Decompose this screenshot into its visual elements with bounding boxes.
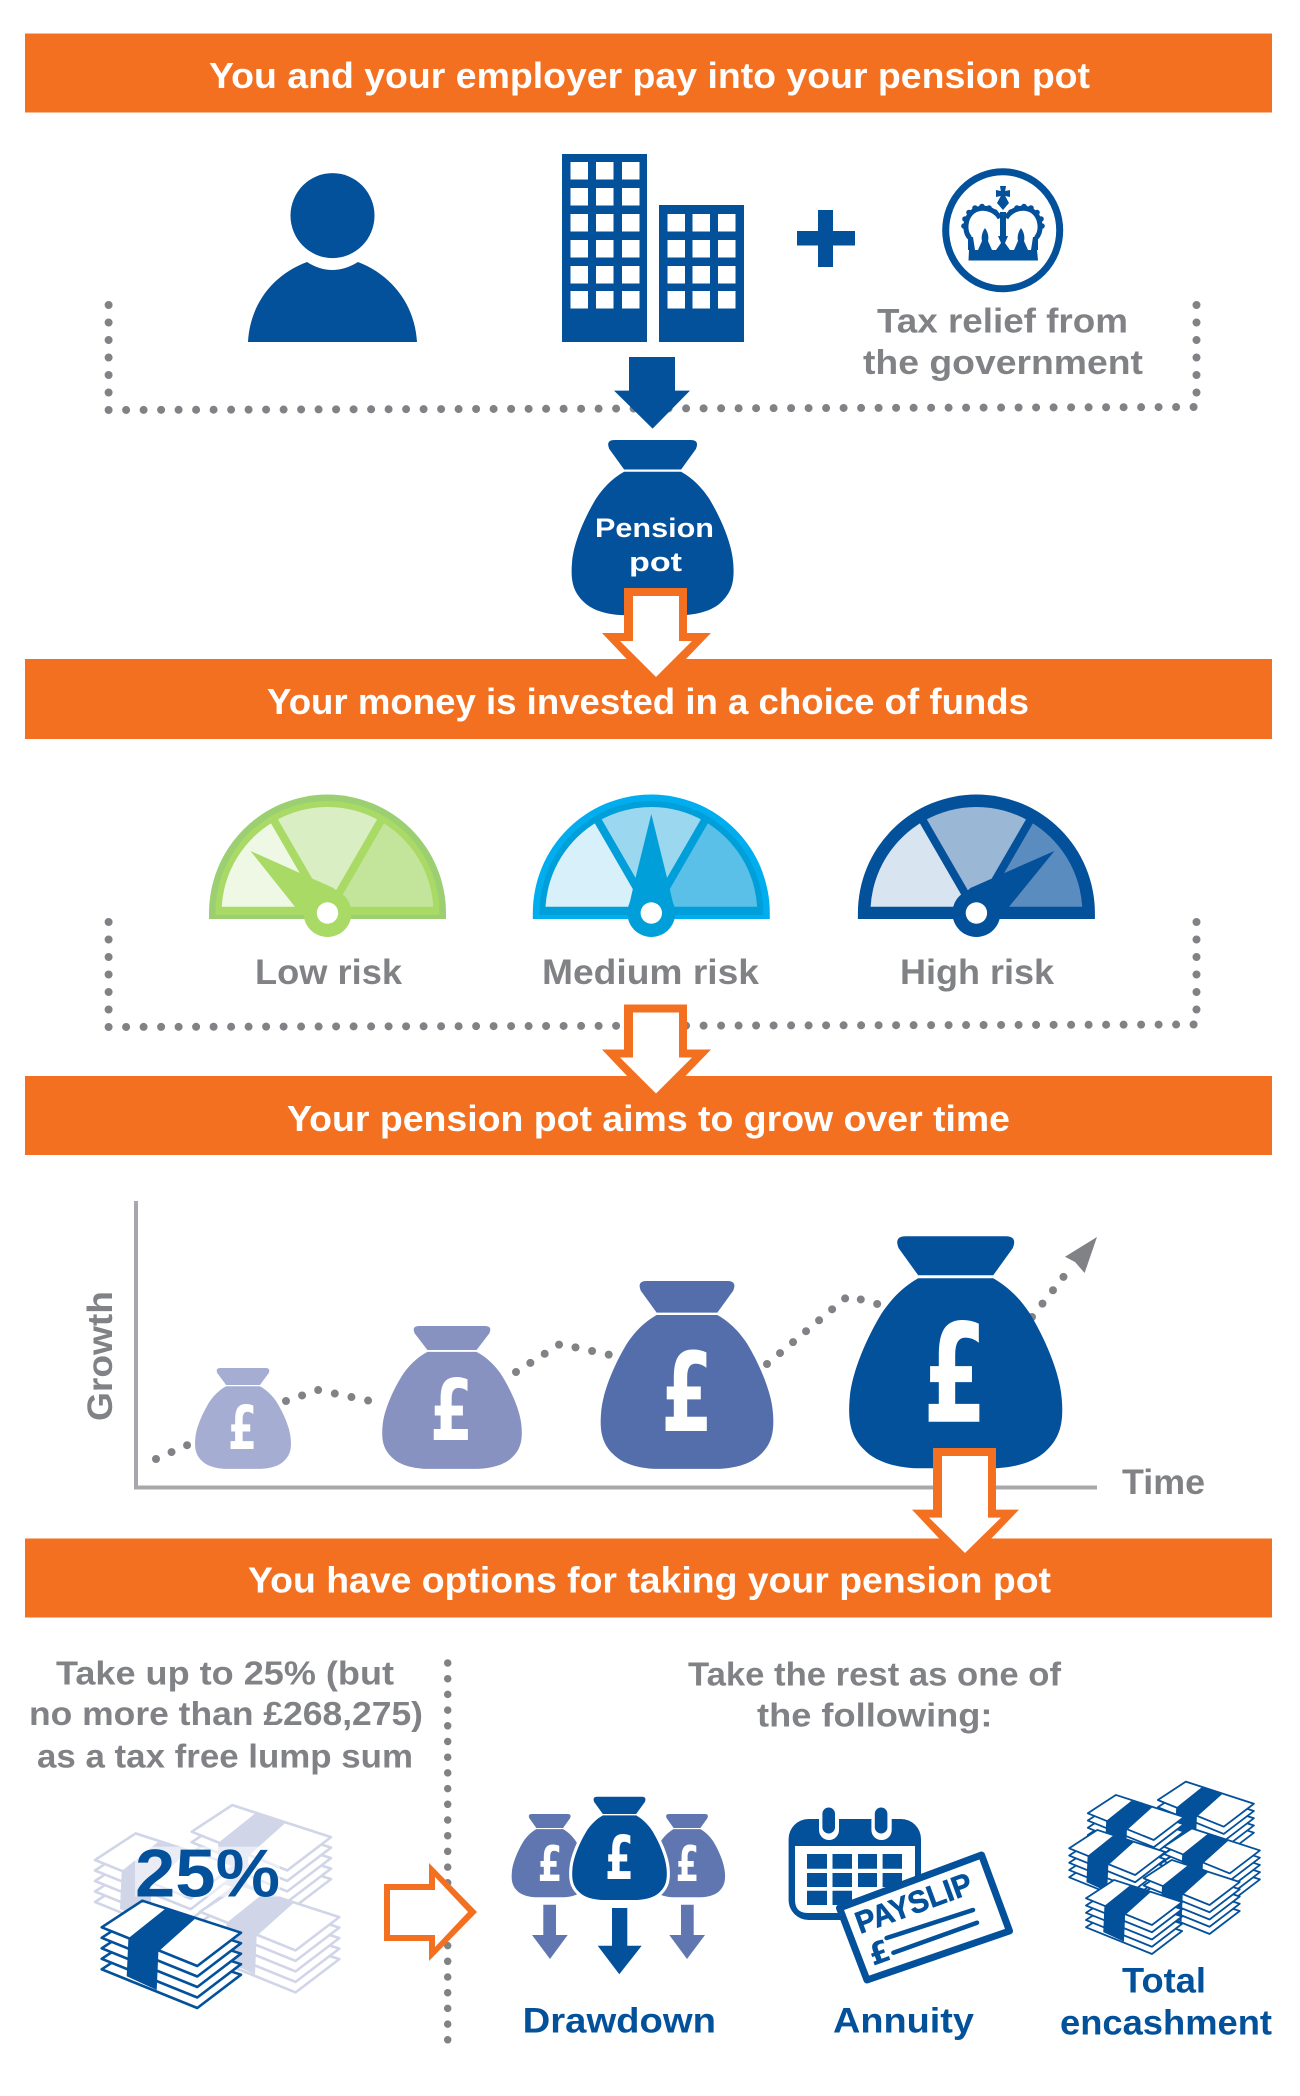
icon: calendar and payslip: PAYSLIP <box>850 1866 977 1941</box>
growth dotted trend line with arrow <box>156 1237 1097 1459</box>
section header: invested in funds: Your money is invested in a choice of funds <box>267 681 1029 722</box>
label: total encashment: Total <box>1122 1962 1206 2001</box>
money bag: largest: £ <box>923 1296 987 1455</box>
icon: calendar and payslip: £ <box>864 1933 895 1974</box>
icon: calendar and payslip <box>789 1806 1010 1980</box>
money bag: small <box>195 1368 291 1469</box>
section header: you and your employer: You and your employer pay into your pension pot <box>209 55 1090 96</box>
icon: employer buildings <box>562 154 744 342</box>
icon: pension pot bag <box>572 440 734 615</box>
icon: drawdown bags and arrows: £ <box>676 1836 699 1893</box>
gauge: medium risk <box>533 795 770 937</box>
dotted bracket: contributions <box>109 305 1197 410</box>
icon: 25% money stacks: 25% <box>135 1836 280 1912</box>
icon: 25% money stacks <box>95 1805 339 2008</box>
section header: you and your employer <box>25 34 1272 112</box>
icon: drawdown bags and arrows: £ <box>538 1836 562 1893</box>
label: tax relief from the government: Tax relief from <box>877 303 1128 341</box>
label: low risk: Low risk <box>255 953 403 992</box>
icon: drawdown bags and arrows: £ <box>605 1823 634 1894</box>
section header: options <box>25 1538 1272 1618</box>
section header: options: You have options for taking your pension pot <box>248 1560 1051 1601</box>
label: medium risk: Medium risk <box>542 953 760 992</box>
gauge: low risk <box>209 795 446 937</box>
arrow: lump sum to rest <box>384 1863 477 1961</box>
icon: person <box>248 173 417 342</box>
axis label: growth: Growth <box>81 1291 120 1421</box>
section header: aims to grow: Your pension pot aims to grow over time <box>287 1098 1010 1139</box>
icon: plus <box>797 210 855 267</box>
money bag: medium: £ <box>430 1362 473 1461</box>
text: lump sum explanation: no more than £268,275) <box>29 1695 423 1732</box>
section header: aims to grow <box>25 1076 1272 1155</box>
icon: pension pot bag: Pension <box>595 513 714 543</box>
axis label: time: Time <box>1122 1463 1205 1502</box>
money bag: large <box>601 1281 773 1469</box>
arrow: contributions down to pot <box>614 357 690 429</box>
label: total encashment <box>1060 1962 1272 2042</box>
label: annuity: Annuity <box>833 2002 975 2041</box>
label: tax relief from the government <box>863 303 1143 382</box>
arrow: funds to growth <box>602 1004 711 1106</box>
dotted bracket: risk <box>109 922 1197 1027</box>
money bag: largest <box>849 1236 1062 1468</box>
icon: government crown <box>946 172 1060 289</box>
money bag: large: £ <box>661 1329 713 1457</box>
section header: invested in funds <box>25 659 1272 739</box>
arrow: growth to options <box>912 1448 1019 1566</box>
text: take the rest: the following: <box>757 1697 992 1734</box>
money bag: medium <box>382 1326 522 1469</box>
dotted divider <box>444 1663 451 2044</box>
label: high risk: High risk <box>900 953 1055 992</box>
text: take the rest: Take the rest as one of <box>688 1655 1062 1692</box>
label: tax relief from the government: the government <box>863 344 1143 382</box>
money bag: small: £ <box>228 1393 257 1464</box>
arrow: pot to funds <box>602 588 711 690</box>
icon: pension pot bag: pot <box>629 547 682 577</box>
label: drawdown: Drawdown <box>523 2002 716 2041</box>
gauge: high risk <box>858 795 1095 937</box>
label: total encashment: encashment <box>1060 2003 1272 2042</box>
text: lump sum explanation: Take up to 25% (but <box>56 1654 394 1691</box>
chart axes <box>136 1201 1097 1488</box>
text: lump sum explanation <box>29 1654 423 1774</box>
text: take the rest <box>688 1655 1062 1734</box>
icon: total encashment money stacks <box>1069 1782 1260 1954</box>
text: lump sum explanation: as a tax free lump sum <box>37 1738 413 1774</box>
icon: drawdown bags and arrows <box>512 1797 725 1974</box>
